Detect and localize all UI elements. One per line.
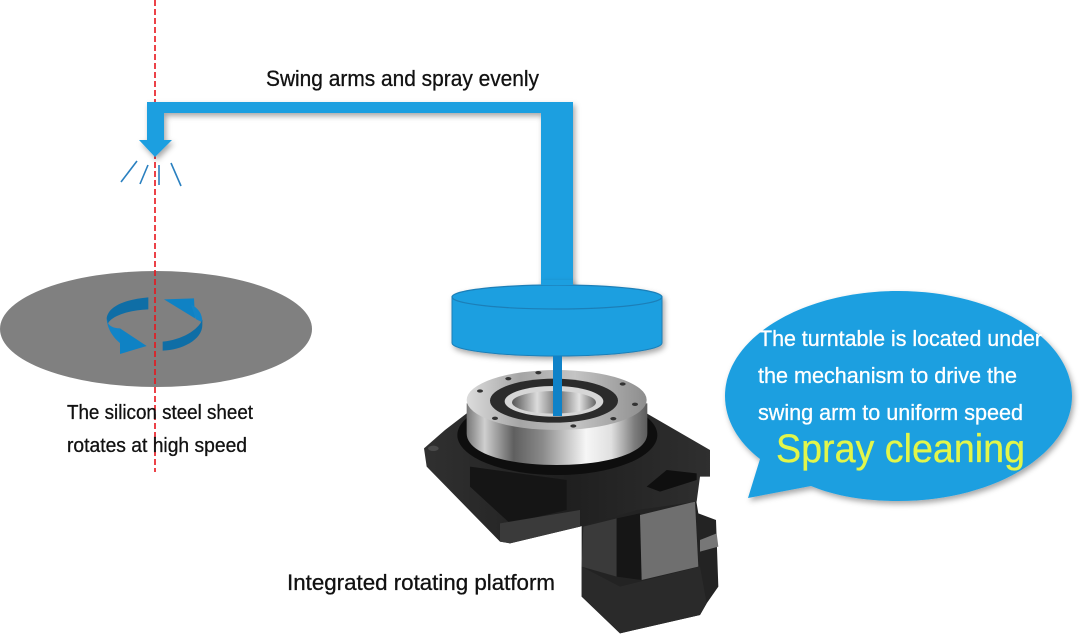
thin blue shaft <box>553 356 562 416</box>
label: silicon steel sheet <box>67 402 253 457</box>
callout body text: The turntable is located under <box>759 326 1042 351</box>
mounting base <box>424 413 710 543</box>
red dashed axis line <box>154 0 156 472</box>
motor body <box>582 493 718 633</box>
label: silicon steel sheet: The silicon steel sheet <box>67 402 253 424</box>
blue cylinder disc <box>452 280 662 356</box>
gray disc: silicon steel sheet <box>0 271 312 387</box>
icon: spray lines <box>121 161 181 186</box>
callout heading: Spray cleaning <box>776 427 1025 471</box>
label: silicon steel sheet: rotates at high speed <box>67 435 247 457</box>
bearing ring <box>457 370 657 475</box>
icon: rotation arrows <box>107 297 202 354</box>
callout body text <box>758 326 1042 425</box>
swing arm with nozzle arrow <box>139 102 573 295</box>
label: rotating platform: Integrated rotating platform <box>287 570 555 595</box>
label: swing arms: Swing arms and spray evenly <box>266 66 539 91</box>
callout body text: the mechanism to drive the <box>758 363 1017 388</box>
speech bubble callout <box>725 291 1072 501</box>
callout body text: swing arm to uniform speed <box>758 400 1023 425</box>
rotating platform product: motor and bearing <box>424 370 718 633</box>
